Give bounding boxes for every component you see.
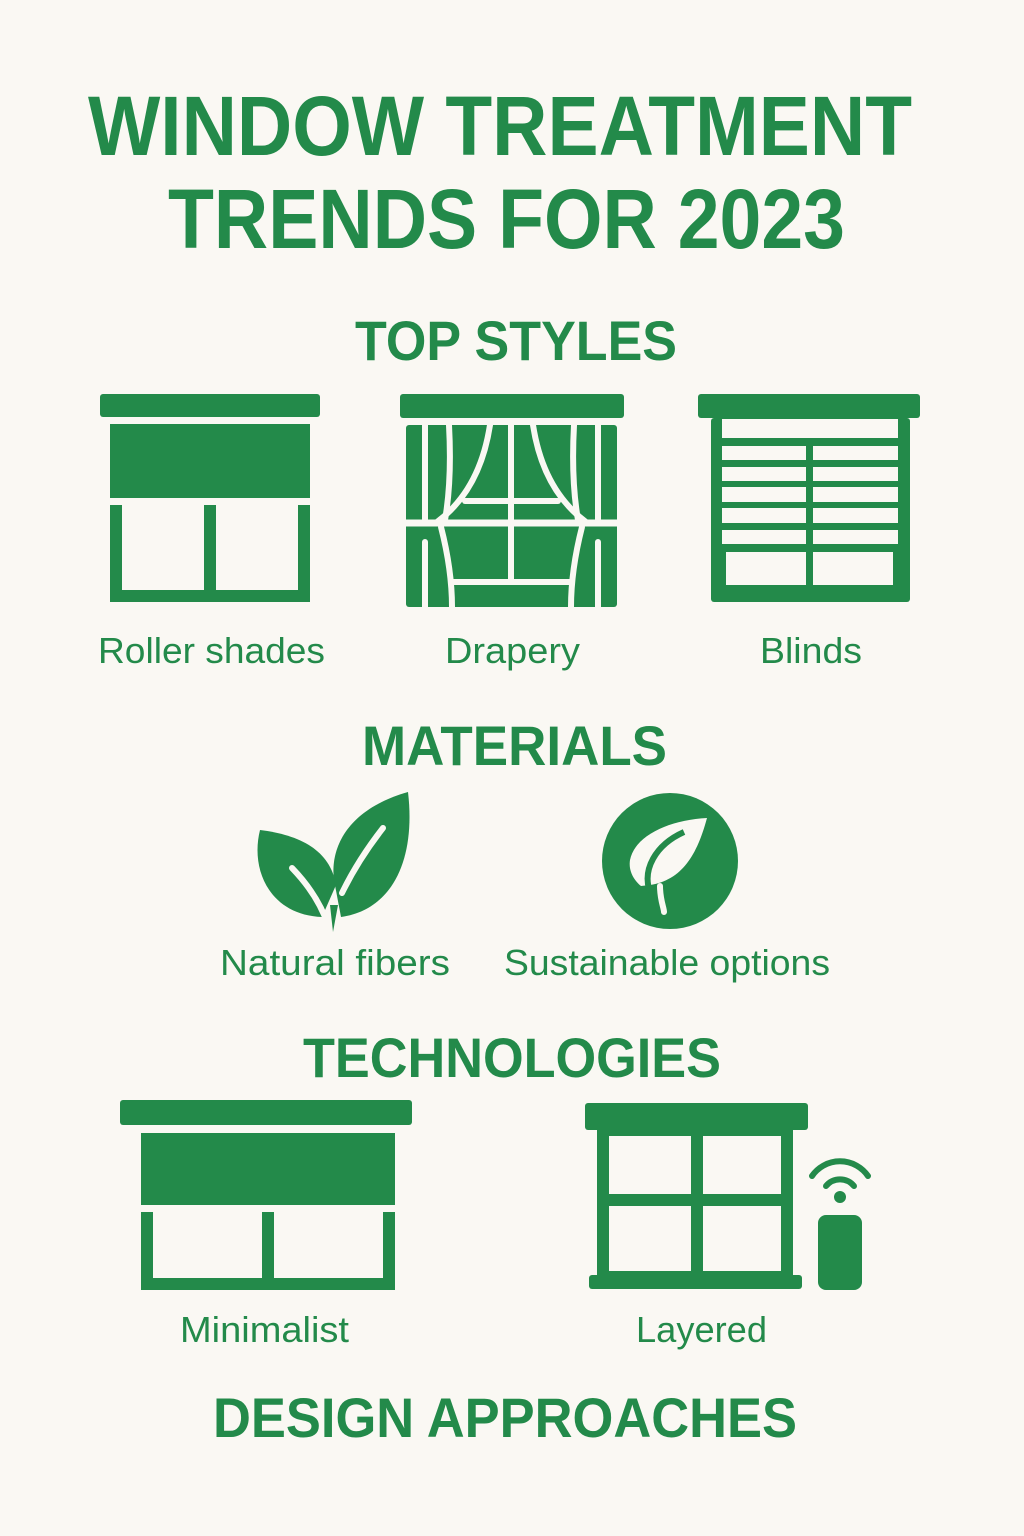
icon: remote with wifi [812,1161,868,1290]
title: TRENDS FOR 2023 [168,172,845,266]
heading: top styles: TOP STYLES [355,309,677,372]
label: natural fibers: Natural fibers [220,942,450,983]
icon: drapery [400,394,624,607]
icon: natural fibers leaves [258,792,410,932]
title: WINDOW TREATMENT [88,79,912,173]
label: layered: Layered [636,1309,767,1350]
icon: layered smart window [585,1103,868,1290]
heading: technologies: TECHNOLOGIES [303,1026,721,1089]
label: blinds: Blinds [760,630,862,671]
icon: blinds [698,394,920,602]
icon: roller shades [100,394,320,602]
icon: sustainable options [602,793,738,929]
title [88,79,912,266]
heading: materials: MATERIALS [362,714,667,777]
label: drapery: Drapery [445,630,580,671]
label: roller shades: Roller shades [98,630,325,671]
label: minimalist: Minimalist [180,1309,349,1350]
label: sustainable options: Sustainable options [504,942,830,983]
heading: design approaches: DESIGN APPROACHES [213,1386,797,1449]
icon: minimalist shade [120,1100,412,1290]
